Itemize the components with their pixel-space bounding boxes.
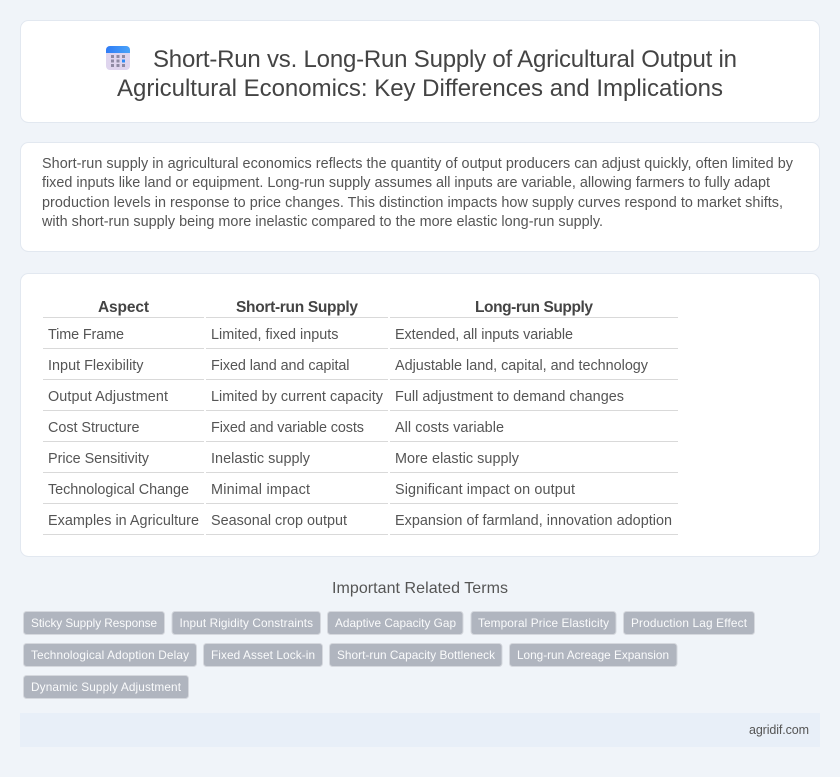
table row: output adjustment (48, 389, 624, 405)
table row: time frame (48, 327, 573, 343)
table row: examples in agriculture: Seasonal crop output (211, 513, 347, 529)
text block: introduction: fixed inputs like land or equipment. Long-run supply assumes all inputs are variable, allowing farmers to fully adapt (42, 175, 770, 191)
title (117, 46, 737, 102)
tag: sticky supply response: Sticky Supply Response (31, 616, 157, 630)
table header row: Long-run Supply (475, 299, 593, 316)
tag: long-run acreage expansion (510, 644, 677, 666)
tag: fixed asset lock-in (204, 644, 322, 666)
table row: cost structure: Fixed and variable costs (211, 420, 364, 436)
tag: dynamic supply adjustment (24, 676, 188, 698)
table row: technological change (48, 482, 575, 498)
table row: examples in agriculture: Examples in Agriculture (48, 513, 199, 529)
tag: long-run acreage expansion: Long-run Acreage Expansion (517, 648, 669, 662)
table row: cost structure: Cost Structure (48, 420, 140, 436)
table row: cost structure (48, 420, 504, 436)
table header row (98, 299, 593, 316)
panel: header (20, 20, 820, 122)
table row: time frame: Limited, fixed inputs (211, 327, 338, 343)
tag: input rigidity constraints: Input Rigidity Constraints (180, 616, 313, 630)
heading: important related terms: Important Related Terms (332, 580, 508, 597)
table row: technological change: Technological Change (48, 482, 189, 498)
text block: introduction: production levels in response to price changes. This distinction impacts how supply curves respond to market shifts, (42, 195, 783, 211)
table row: output adjustment: Full adjustment to demand changes (395, 389, 624, 405)
tag: technological adoption delay (24, 644, 196, 666)
table row: output adjustment: Output Adjustment (48, 389, 168, 405)
text block: introduction (41, 156, 794, 230)
table row: price sensitivity: Price Sensitivity (48, 451, 150, 467)
panel: related term tags (24, 612, 754, 698)
tag: sticky supply response (24, 612, 164, 634)
tag: temporal price elasticity: Temporal Price Elasticity (478, 616, 609, 630)
text block: introduction: with short-run supply being more inelastic compared to the more elastic long-run supply. (41, 214, 603, 230)
table row: input flexibility: Adjustable land, capital, and technology (395, 358, 649, 374)
table row: examples in agriculture (48, 513, 672, 529)
table row: examples in agriculture: Expansion of farmland, innovation adoption (395, 513, 672, 529)
table row: price sensitivity: More elastic supply (395, 451, 520, 467)
tag: adaptive capacity gap: Adaptive Capacity Gap (335, 616, 456, 630)
table row: price sensitivity (48, 451, 520, 467)
tag: adaptive capacity gap (328, 612, 463, 634)
table row: cost structure: All costs variable (395, 420, 504, 436)
table row: time frame: Time Frame (48, 327, 124, 343)
tag: short-run capacity bottleneck (330, 644, 502, 666)
panel: introduction (20, 142, 820, 252)
footer (20, 713, 820, 747)
footer: agridif.com (749, 723, 809, 737)
table header row: Aspect (98, 299, 149, 316)
table row: technological change: Minimal impact (211, 482, 310, 498)
table row: input flexibility: Fixed land and capital (211, 358, 350, 374)
table row: input flexibility (48, 358, 649, 374)
table row: technological change: Significant impact on output (395, 482, 575, 498)
tag: dynamic supply adjustment: Dynamic Supply Adjustment (31, 680, 182, 694)
tag: short-run capacity bottleneck: Short-run Capacity Bottleneck (337, 648, 495, 662)
text block: introduction: Short-run supply in agricultural economics reflects the quantity of output producers can adjust quickly, often limited by (42, 156, 794, 172)
table row: price sensitivity: Inelastic supply (211, 451, 311, 467)
title: Agricultural Economics: Key Differences and Implications (117, 75, 723, 102)
tag: technological adoption delay: Technological Adoption Delay (31, 648, 189, 662)
table row: input flexibility: Input Flexibility (48, 358, 144, 374)
tag: temporal price elasticity (471, 612, 616, 634)
tag: fixed asset lock-in: Fixed Asset Lock-in (211, 648, 315, 662)
panel: comparison table (20, 274, 820, 556)
tag: production lag effect (624, 612, 754, 634)
tag: production lag effect: Production Lag Effect (631, 616, 748, 630)
title: Short-Run vs. Long-Run Supply of Agricultural Output in (153, 46, 737, 73)
icon: calendar (106, 46, 130, 70)
table row: time frame: Extended, all inputs variable (395, 327, 573, 343)
table row: output adjustment: Limited by current capacity (211, 389, 384, 405)
tag: input rigidity constraints (172, 612, 320, 634)
table header row: Short-run Supply (236, 299, 358, 316)
